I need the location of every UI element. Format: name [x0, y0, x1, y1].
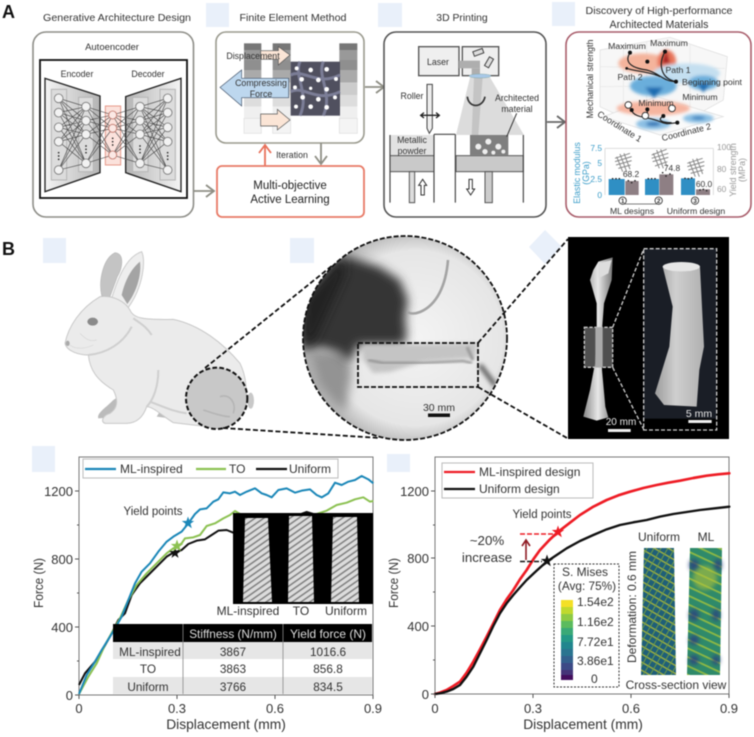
- architected label: Architected: [495, 93, 539, 103]
- colorbar: [561, 600, 573, 680]
- x-ray dashed selection: [358, 343, 478, 387]
- zoom line: rabbit to x-ray top: [205, 265, 333, 368]
- x axis ticks: 0: [75, 701, 83, 716]
- zoom line: rabbit to x-ray bottom: [223, 428, 380, 438]
- panel: finite element method: [216, 32, 364, 143]
- surface labels: Minimum: [638, 98, 674, 108]
- bar chart: [572, 142, 747, 216]
- down arrow: [467, 179, 475, 195]
- x axis ticks: 0.9: [720, 701, 738, 716]
- left axis ticks: 7.5: [590, 143, 602, 153]
- surface labels: Minimum: [682, 92, 718, 102]
- y axis title: Force (N): [32, 558, 46, 608]
- heading: architected materials: Architected Materials: [610, 19, 708, 31]
- y axis ticks: 400: [51, 620, 73, 635]
- scanner box: [462, 47, 499, 76]
- left axis ticks: 2.5: [590, 174, 602, 184]
- zoom circle on hind leg: [186, 368, 247, 429]
- bone crop box: [584, 327, 613, 367]
- x axis title: Displacement (mm): [166, 717, 286, 732]
- stress legend box: 7.72e1: [577, 635, 614, 649]
- surface labels: Path 1: [665, 65, 691, 75]
- chart: force displacement right: [387, 457, 738, 732]
- data table: 1016.6: [310, 645, 346, 659]
- deformation label: Deformation: 0.6 mm: [625, 551, 639, 663]
- right axis ticks: [717, 142, 731, 194]
- panel: autoencoder: [33, 32, 194, 217]
- x axis ticks: 0.9: [364, 701, 382, 716]
- material label: material: [501, 104, 533, 114]
- left axis unit: (GPa): [581, 161, 591, 185]
- legend: ML-inspired design: [479, 465, 580, 479]
- lens: [469, 74, 491, 78]
- data table: 3863: [220, 662, 247, 676]
- surface labels: Path 2: [617, 72, 643, 82]
- cylinder crop panel: [644, 249, 716, 419]
- right axis ticks: 60: [717, 184, 727, 194]
- arrow: FEM to active learning (iteration down): [315, 143, 327, 164]
- arrow: displacement lower: [261, 109, 290, 130]
- arrow: displacement upper: [261, 47, 290, 65]
- bar value labels: 68.2: [623, 169, 639, 179]
- inset labels: ML-inspired: [217, 604, 279, 618]
- plot frame: [435, 457, 729, 694]
- increase arrow: [522, 540, 530, 560]
- scale bar 30 mm: [428, 414, 450, 417]
- paths: [627, 52, 676, 82]
- right axis unit: (MPa): [737, 158, 747, 182]
- y axis ticks: 1200: [400, 484, 429, 499]
- inset label TO: TO: [293, 604, 309, 618]
- x axis ticks: 0.3: [524, 701, 542, 716]
- yield stars: [541, 526, 564, 566]
- build platforms: [390, 156, 434, 172]
- data table: [113, 624, 372, 694]
- arrow: 3D printing to discovery: [547, 116, 565, 128]
- compressing force label: Compressing: [235, 78, 287, 88]
- scale label 5 mm: 5 mm: [686, 408, 712, 420]
- bone micro CT panel: [568, 237, 729, 439]
- force curves: [435, 473, 729, 694]
- right axis ticks: 80: [717, 164, 727, 174]
- powder label: powder: [398, 146, 426, 156]
- ML lattice: [687, 548, 722, 675]
- surface labels: Maximum: [608, 41, 646, 51]
- circled numbers: 2: [657, 198, 661, 205]
- y axis ticks: 1200: [44, 484, 73, 499]
- y axis ticks: 0: [66, 688, 73, 703]
- rotation arrow: [467, 97, 485, 105]
- neural network diagram: [45, 78, 181, 192]
- x axis ticks: 0: [431, 701, 439, 716]
- data table: 3766: [220, 680, 247, 694]
- arrow: active learning to FEM (up): [259, 145, 271, 166]
- left axis ticks: 0: [597, 190, 602, 200]
- legend: ML-inspired: [120, 462, 183, 476]
- FEM diagram: [220, 43, 357, 133]
- stress legend box: S. Mises: [562, 565, 608, 579]
- circled numbers: 1: [621, 198, 625, 205]
- displacement label: Displacement: [226, 51, 280, 61]
- x axis ticks: 0.6: [622, 701, 640, 716]
- left axis ticks: 5: [597, 158, 602, 168]
- axis label: mechanical strength: Mechanical strength: [585, 40, 595, 118]
- yield annotation dashes: [520, 533, 553, 535]
- surface labels: Beginning point: [682, 77, 743, 87]
- y axis ticks: 800: [407, 551, 429, 566]
- active learning text line 1: Multi-objective: [253, 180, 327, 192]
- active learning text line 2: Active Learning: [250, 194, 330, 206]
- roller: [427, 84, 432, 133]
- data table: 834.5: [313, 680, 343, 694]
- legend: [442, 463, 593, 498]
- data table: 856.8: [313, 662, 343, 676]
- y axis ticks: [44, 484, 73, 703]
- x axis title: Displacement (mm): [523, 717, 643, 732]
- panel: discovery of materials: [566, 32, 751, 217]
- inset: lattice renders: [233, 513, 373, 604]
- y axis ticks: [400, 484, 429, 702]
- powder: [390, 135, 434, 156]
- mirrors: [473, 48, 494, 68]
- circled numbers: [621, 198, 697, 205]
- bone: [583, 257, 613, 421]
- heading: 3D printing: 3D Printing: [436, 13, 488, 24]
- data table: Uniform: [127, 680, 169, 694]
- up arrow: [419, 179, 427, 195]
- stress legend box: (Avg: 75%): [558, 579, 616, 593]
- rabbit illustration: [65, 252, 254, 429]
- increase label: ~20%: [470, 533, 504, 548]
- roller label: Roller: [401, 91, 424, 101]
- zoom line: x-ray to bone bottom: [478, 387, 567, 438]
- x axis ticks: [75, 701, 382, 716]
- data table: ML-inspired: [119, 645, 181, 659]
- circled numbers: 3: [693, 198, 697, 205]
- data table: 3867: [220, 645, 246, 659]
- data table: Yield force (N): [290, 627, 366, 641]
- chart: force displacement left: [32, 457, 382, 732]
- legend: Uniform design: [479, 482, 560, 496]
- surface labels: Maximum: [650, 38, 688, 48]
- left axis ticks: [590, 143, 602, 200]
- stress legend box: [554, 564, 619, 687]
- printed material: [470, 135, 508, 155]
- ML label: ML: [698, 530, 715, 544]
- force label: Force: [250, 89, 272, 99]
- x axis ticks: [431, 701, 738, 716]
- stress legend box: 3.86e1: [577, 654, 614, 668]
- autoencoder title: Autoencoder: [85, 42, 139, 53]
- bone cylinder: [655, 267, 704, 407]
- heading: finite element method: Finite Element Method: [240, 13, 347, 24]
- heading: generative architecture design: Generative Architecture Design: [43, 13, 191, 24]
- legend: [83, 459, 338, 478]
- right axis ticks: 100: [717, 142, 731, 152]
- panel: multi-objective active learning: [217, 166, 364, 217]
- y axis ticks: 800: [51, 552, 73, 567]
- left axis title: Elastic modulus: [572, 142, 582, 204]
- scale label 30 mm: 30 mm: [423, 402, 455, 414]
- arrow: compressing force: [220, 70, 289, 106]
- y axis ticks: 400: [407, 619, 429, 634]
- x-ray image: [300, 236, 507, 440]
- right axis title: Yield strength: [728, 143, 738, 197]
- uniform lattice: [641, 548, 676, 675]
- axis label: coordinate 2: Coordinate 2: [661, 121, 712, 143]
- panel label B: B: [2, 239, 15, 259]
- decoder label: Decoder: [131, 69, 165, 79]
- encoder label: Encoder: [61, 69, 93, 79]
- data table: Stiffness (N/mm): [189, 627, 277, 641]
- stress legend box: 1.16e2: [577, 615, 614, 629]
- y axis title: Force (N): [387, 558, 401, 608]
- 3D landscape plot: [600, 37, 727, 135]
- bar value labels: [623, 163, 712, 189]
- legend: TO: [229, 462, 245, 476]
- zoom line: x-ray to bone top: [478, 239, 568, 343]
- stress legend box: 1.54e2: [577, 595, 614, 609]
- x axis ticks: 0.3: [168, 701, 186, 716]
- scale label 20 mm: 20 mm: [606, 417, 636, 428]
- data table: TO: [140, 662, 156, 676]
- yield stars: [169, 516, 194, 558]
- increase label 2: increase: [462, 550, 512, 565]
- laser box: [419, 47, 459, 76]
- arrow: FEM to 3D printing: [365, 81, 384, 93]
- legend: Uniform: [289, 462, 331, 476]
- uniform design label: Uniform design: [667, 206, 725, 216]
- panel label A: A: [2, 2, 15, 22]
- stress legend box: 0: [591, 672, 598, 686]
- iteration label: Iteration: [276, 150, 308, 160]
- x axis ticks: 0.6: [266, 701, 284, 716]
- surface labels: [608, 38, 743, 108]
- force curves: [79, 476, 373, 694]
- metallic label: Metallic: [397, 135, 428, 145]
- panel: 3D printing: [384, 32, 546, 217]
- plot frame: [79, 457, 373, 695]
- yield points label: Yield points: [123, 506, 183, 518]
- arrow: autoencoder to active learning: [194, 185, 214, 197]
- laser label: Laser: [427, 57, 449, 67]
- inset label uniform: Uniform: [325, 604, 367, 618]
- laser cone: [456, 77, 524, 135]
- ml designs label: ML designs: [610, 206, 655, 216]
- yield points label: Yield points: [512, 509, 572, 521]
- y axis ticks: 0: [422, 687, 429, 702]
- bar value labels: 60.0: [696, 179, 712, 189]
- decorative pale squares: [32, 2, 575, 472]
- uniform label: Uniform: [638, 530, 680, 544]
- bar value labels: 74.8: [664, 163, 680, 173]
- axis label: coordinate 1: Coordinate 1: [596, 109, 644, 144]
- lattice thumbnails: [615, 149, 704, 177]
- cross-section label: Cross-section view: [626, 678, 727, 692]
- heading: discovery: Discovery of High-performance: [586, 6, 733, 17]
